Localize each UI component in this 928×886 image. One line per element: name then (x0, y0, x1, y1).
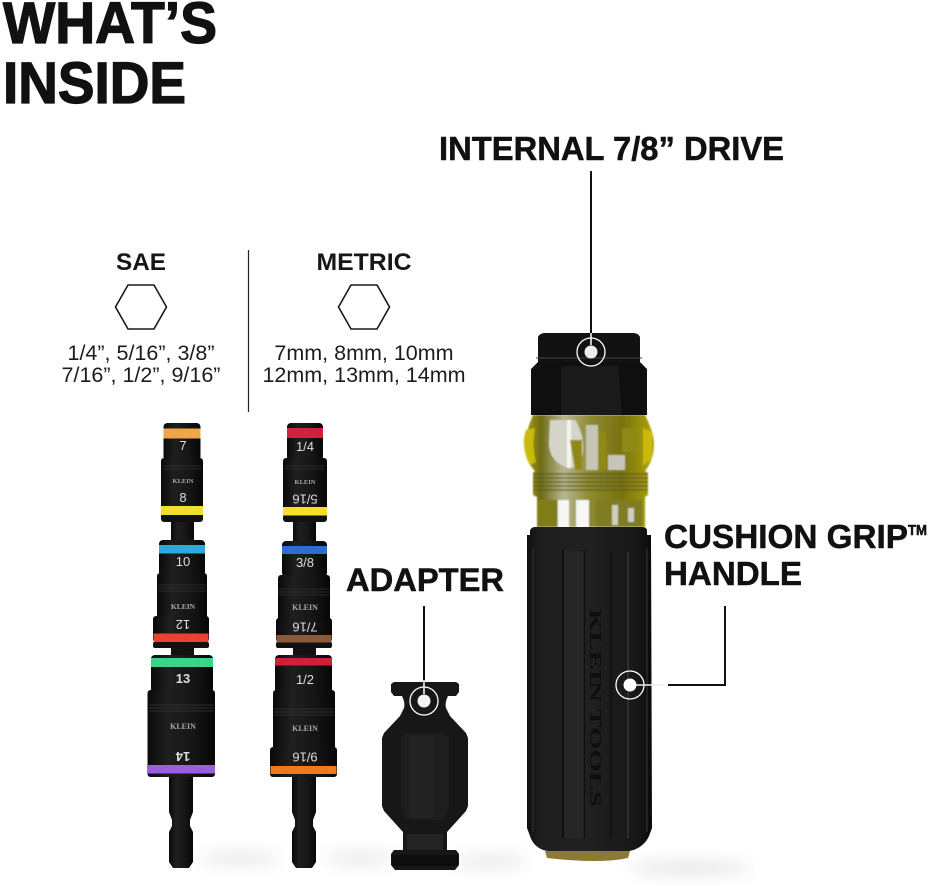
screwdriver handle (524, 333, 667, 861)
socket 7 / 8: 7 (179, 438, 187, 453)
socket 3/8 / 7/16: 3/8 (296, 555, 314, 570)
heading: cushion grip handle (664, 518, 927, 592)
marker: adapter (410, 680, 438, 715)
text: SAE sizes: 7/16”, 1/2”, 9/16” (62, 363, 220, 387)
socket 10 / 12: 12 (176, 617, 190, 632)
socket 7 / 8: 8 (179, 490, 187, 505)
socket 10 / 12: KLEIN (171, 602, 196, 611)
clear yellow body (524, 415, 654, 527)
floor shadows (200, 853, 750, 874)
socket 3/8 / 7/16 (276, 541, 332, 659)
socket 7 / 8: KLEIN (173, 478, 194, 485)
panel: SAE sizes (62, 249, 220, 387)
socket 1/2 / 9/16: 9/16 (292, 750, 318, 764)
socket 1/2 / 9/16: 1/2 (296, 672, 314, 687)
heading: internal drive: INTERNAL 7/8” DRIVE (439, 130, 784, 167)
heading: cushion grip handle: CUSHION GRIP (664, 518, 908, 555)
panel: metric sizes (262, 249, 466, 387)
brass base (545, 851, 630, 861)
socket 7 / 8 (161, 423, 203, 542)
text: metric sizes: 12mm, 13mm, 14mm (262, 363, 466, 387)
socket 1/2 / 9/16 (270, 655, 337, 777)
leader line: grip (668, 606, 725, 685)
leader line: internal drive (590, 171, 592, 334)
heading: adapter: ADAPTER (346, 562, 504, 598)
socket 1/2 / 9/16: KLEIN (292, 724, 318, 733)
socket 13 / 14: 14 (175, 749, 190, 764)
cushion grip (527, 527, 652, 851)
SAE socket stack (270, 423, 337, 868)
text: SAE sizes: 1/4”, 5/16”, 3/8” (68, 341, 214, 365)
socket 1/4 / 5/16: 5/16 (292, 492, 318, 506)
socket 1/4 / 5/16: 1/4 (296, 439, 314, 454)
text: SAE sizes (62, 341, 220, 387)
top cap (531, 333, 647, 415)
adapter (382, 680, 468, 870)
socket 10 / 12: 10 (176, 554, 190, 569)
socket 13 / 14: 13 (176, 671, 190, 686)
title (3, 0, 217, 116)
icon: SAE hexagon (116, 285, 166, 329)
handle lettering: KLEIN TOOLS (586, 609, 605, 807)
heading: cushion grip handle: HANDLE (664, 555, 802, 592)
socket 3/8 / 7/16: KLEIN (292, 603, 318, 612)
socket 13 / 14 (148, 655, 215, 777)
socket 13 / 14: KLEIN (170, 722, 196, 731)
socket 10 / 12 (153, 540, 209, 659)
text: metric sizes: 7mm, 8mm, 10mm (274, 341, 454, 365)
bit shank (169, 777, 193, 868)
socket 1/4 / 5/16: KLEIN (295, 479, 316, 486)
metric socket stack (148, 423, 215, 868)
socket 1/4 / 5/16 (283, 423, 327, 544)
bit shank (292, 777, 316, 868)
marker: grip (616, 671, 667, 699)
text: metric sizes (262, 341, 466, 387)
icon: metric hexagon (338, 285, 390, 329)
marker: drive (577, 333, 605, 366)
leader line: adapter (423, 606, 425, 690)
socket 3/8 / 7/16: 7/16 (292, 620, 318, 634)
heading: SAE: SAE (116, 249, 166, 276)
title: INSIDE (3, 51, 186, 116)
heading: METRIC: METRIC (316, 249, 412, 276)
